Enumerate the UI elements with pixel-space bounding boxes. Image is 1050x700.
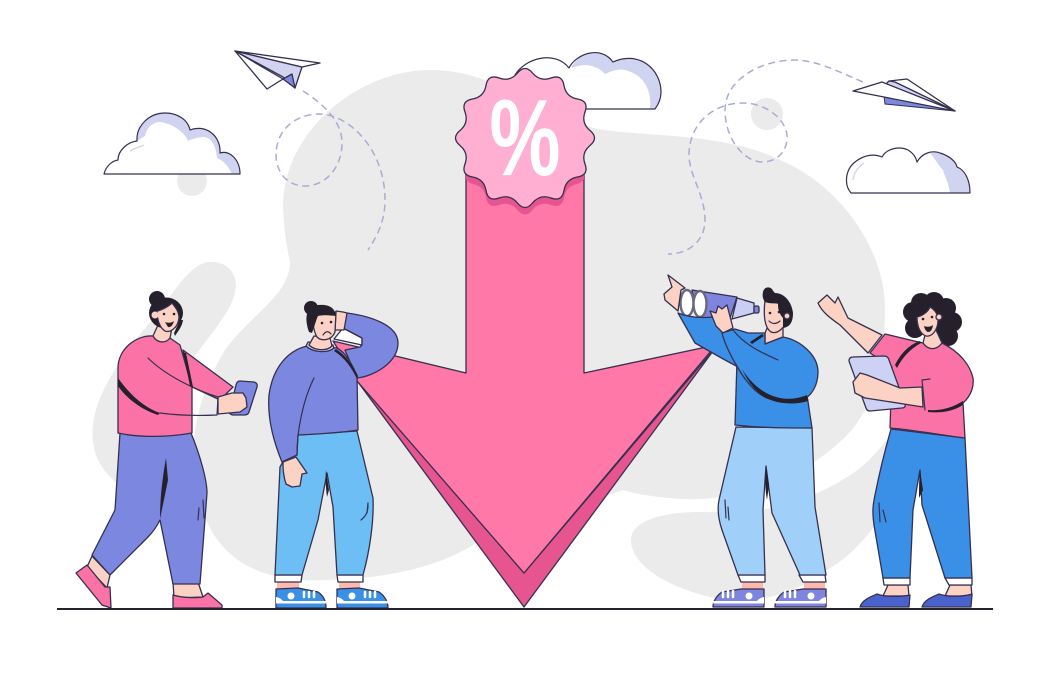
hand [218,393,247,414]
back arm [183,350,233,400]
dashed flight path right [668,60,863,254]
shoe two [922,594,972,607]
sweater [118,336,192,436]
strap [742,369,808,403]
forearm and hand [853,373,923,407]
cuffs [883,578,972,585]
hair [306,305,336,333]
arrow front face [333,170,716,573]
shoe two [337,588,388,608]
hand on head [335,311,347,330]
paper plane right [853,79,955,111]
cloud right [846,148,970,193]
lowered hand [283,457,307,487]
strap [895,341,921,368]
neck [765,326,783,344]
facial features [769,312,771,314]
torso [735,335,812,428]
raised arm [678,313,740,368]
shoe two [775,589,826,607]
hand on binoculars [710,305,733,333]
person: woman with phone [76,291,257,608]
percent badge [456,68,594,208]
cuffs [738,575,826,582]
cloud left [104,113,240,174]
sleeve inner lining [334,328,362,345]
phone [229,381,257,415]
dashed flight path left [276,91,385,250]
front foot [173,582,203,598]
face [157,303,179,331]
facial features [163,313,165,315]
trousers [718,427,826,575]
hair [149,298,183,328]
neck [153,325,172,342]
binoculars [680,290,759,319]
person: man with binoculars [664,275,826,607]
trouser cuffs [275,575,363,582]
person: woman with tablet [818,292,973,607]
paper plane left [235,51,320,89]
trousers [275,431,373,575]
back foot [87,556,110,588]
ankles [277,582,360,589]
sweater [269,346,358,462]
shirt [870,334,973,438]
collar [306,342,334,352]
ground line [57,608,993,610]
trousers [92,433,207,584]
arrow darker underside [355,347,716,607]
shoe one [713,589,764,607]
neck [309,336,332,350]
face [312,312,336,340]
raised arm [343,313,398,378]
curly hair [903,292,962,346]
shoe one [276,588,326,608]
ankles [742,582,825,589]
background blobs [92,70,887,601]
cloud top [515,52,661,109]
shoulder sleeve [722,329,818,400]
feet skin [883,585,972,596]
sleeve [148,358,218,415]
strap [334,349,358,379]
face [917,307,938,336]
person: worried woman [269,301,398,608]
face [764,300,788,333]
raised arm [818,295,882,353]
badge shadow [466,175,584,214]
shoe one [860,594,910,607]
big down arrow [332,174,712,608]
facial features [922,318,924,320]
pointing hand [664,275,685,311]
sleeve [922,379,930,410]
hair [763,287,793,328]
neck [923,330,942,349]
tablet [849,356,905,411]
trousers [873,429,972,578]
facial features [321,322,323,324]
bag strap [118,378,160,415]
percent sign: % [489,78,561,199]
